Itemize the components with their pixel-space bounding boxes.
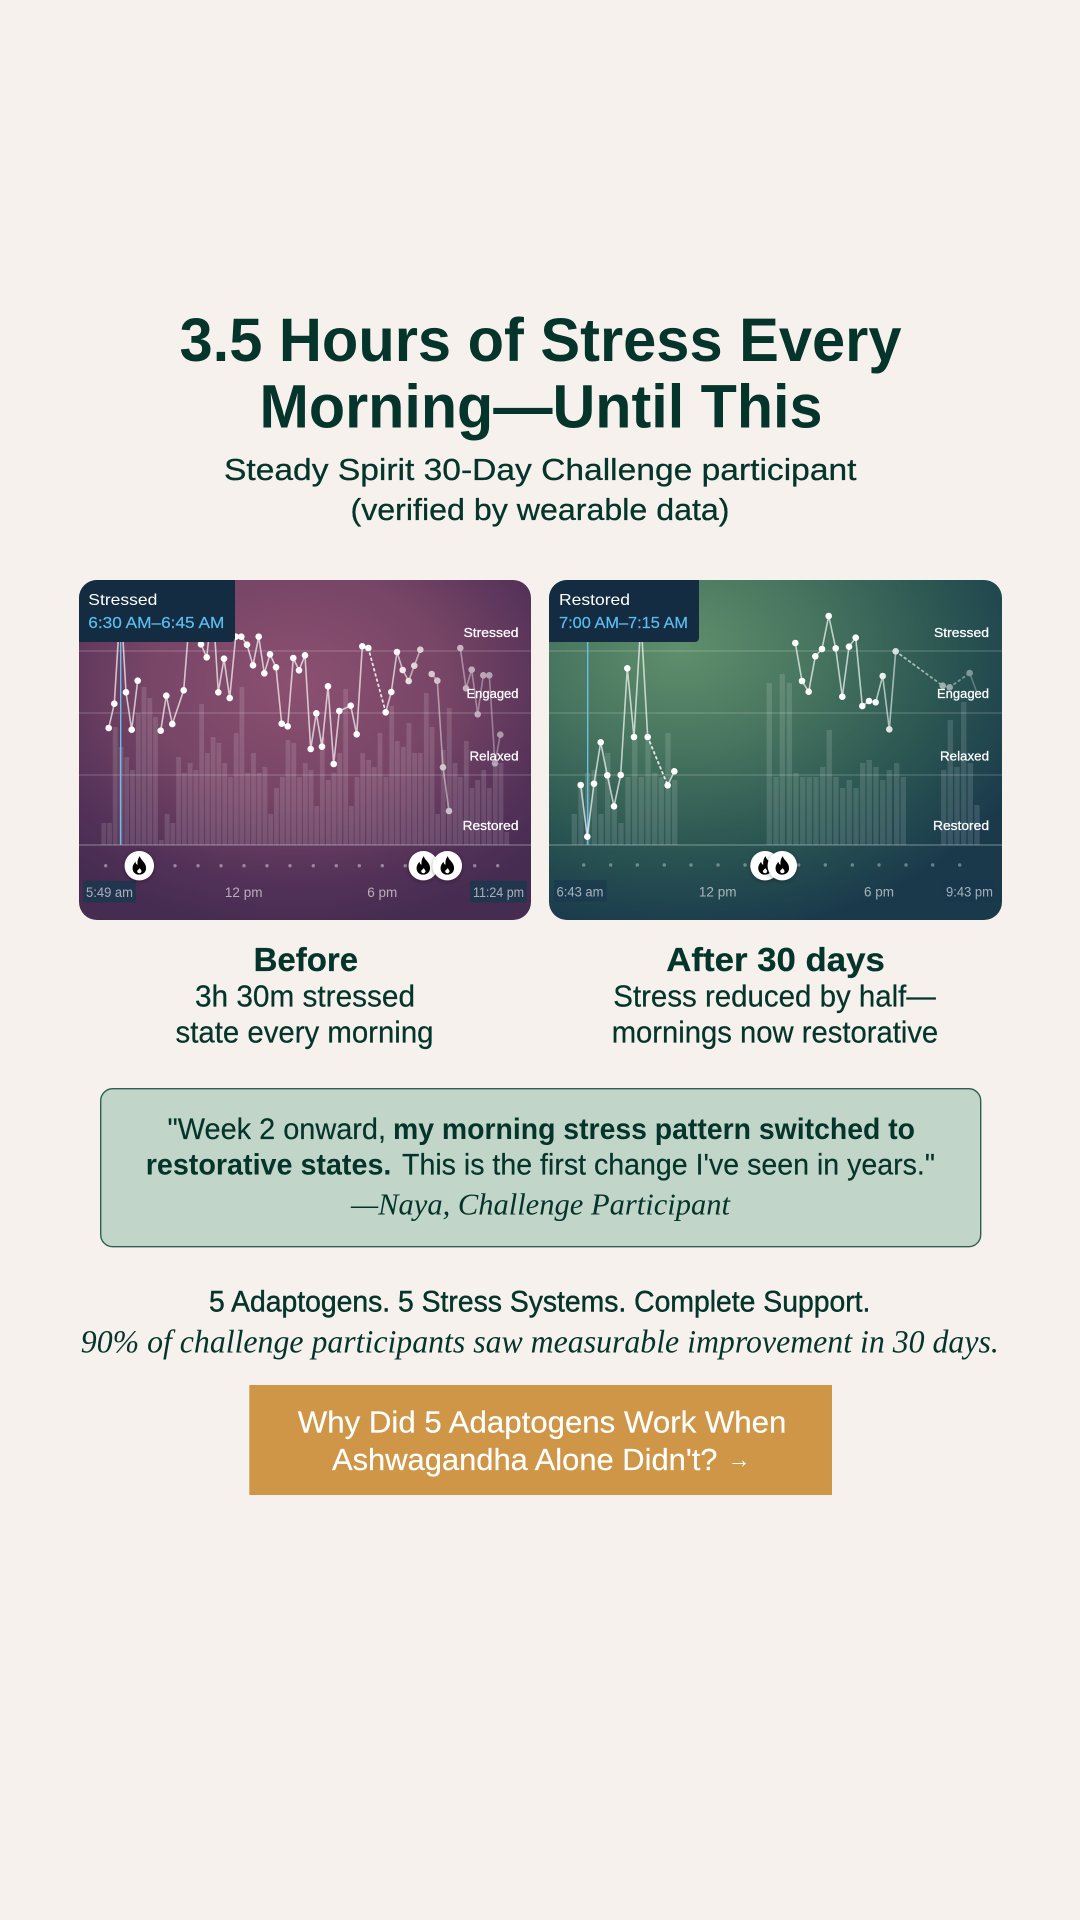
call to action button (249, 1385, 832, 1495)
icon: flame marker evening one (409, 851, 438, 880)
line chart: after stress (577, 613, 977, 840)
time axis labels: 6 pm (367, 885, 397, 900)
call to action button: → (728, 1446, 750, 1474)
panel: before chart card (79, 580, 531, 920)
time axis labels: 5:49 am (86, 885, 133, 900)
line chart: before stress (105, 633, 504, 814)
after caption: After 30 days (666, 941, 885, 978)
bar chart: before activity (104, 687, 507, 845)
timeline dots (582, 863, 961, 867)
before caption: Before (254, 941, 358, 978)
infographic page (79, 316, 1002, 1495)
icon: flame marker two (768, 851, 797, 880)
quote attribution: —Naya, Challenge Participant (350, 1186, 731, 1221)
icon: flame marker one (750, 851, 780, 880)
panel: after chart card (549, 580, 1002, 920)
time axis labels (554, 880, 995, 902)
supporting statement: 5 Adaptogens. 5 Stress Systems. Complete Support. (209, 1286, 870, 1319)
stress level labels: Engaged (466, 686, 518, 701)
after caption: mornings now restorative (612, 1016, 938, 1050)
tooltip: stressed time (79, 580, 235, 642)
tooltip: restored time: Restored (559, 592, 630, 609)
title: 3.5 Hours of Stress Every (180, 306, 902, 374)
timeline dots (104, 864, 499, 867)
time axis labels: 6 pm (864, 884, 894, 900)
subtitle: (verified by wearable data) (350, 492, 730, 527)
stress level labels: Restored (933, 818, 989, 833)
quote text (146, 1113, 935, 1181)
statistic line: 90% of challenge participants saw measurable improvement in 30 days. (81, 1324, 999, 1360)
stress level labels: Relaxed (940, 748, 989, 764)
quote text: restorative states. (146, 1148, 391, 1181)
tooltip: restored time: 7:00 AM–7:15 AM (559, 615, 688, 632)
after caption: Stress reduced by half— (613, 980, 936, 1014)
callout: testimonial (101, 1089, 981, 1247)
stress level labels: Restored (462, 818, 518, 833)
time axis labels: 9:43 pm (946, 884, 993, 900)
stress level labels: Stressed (934, 625, 989, 640)
tooltip: stressed time: Stressed (88, 592, 157, 609)
quote text: my morning stress pattern switched to (393, 1113, 915, 1146)
stress level labels (462, 625, 518, 833)
bar chart: after activity (574, 674, 977, 845)
time axis labels: 12 pm (225, 885, 262, 900)
icon: flame marker morning (125, 851, 154, 880)
highlighted time marker (587, 642, 588, 845)
call to action button: Ashwagandha Alone Didn't? (332, 1443, 718, 1477)
title (180, 306, 902, 440)
stress level labels: Stressed (464, 625, 518, 640)
time axis labels: 12 pm (699, 884, 736, 900)
before caption: state every morning (176, 1016, 434, 1050)
after caption (612, 941, 938, 1050)
time axis labels: 6:43 am (556, 884, 604, 900)
stress level labels: Relaxed (470, 748, 518, 764)
time axis labels (83, 881, 527, 902)
quote text: "Week 2 onward, (168, 1113, 386, 1146)
quote text: This is the first change I've seen in years." (402, 1148, 935, 1181)
stress level labels (933, 625, 989, 833)
title: Morning—Until This (260, 372, 822, 440)
subtitle: Steady Spirit 30-Day Challenge participant (224, 452, 857, 487)
highlighted time marker (120, 642, 122, 845)
time axis labels: 11:24 pm (473, 885, 524, 900)
subtitle (224, 452, 857, 527)
icon: flame marker evening two (433, 851, 462, 880)
before caption (176, 941, 434, 1050)
tooltip: restored time (549, 580, 699, 642)
call to action button: Why Did 5 Adaptogens Work When (298, 1405, 786, 1439)
before caption: 3h 30m stressed (195, 980, 415, 1014)
tooltip: stressed time: 6:30 AM–6:45 AM (88, 615, 224, 632)
stress level labels: Engaged (937, 686, 989, 701)
